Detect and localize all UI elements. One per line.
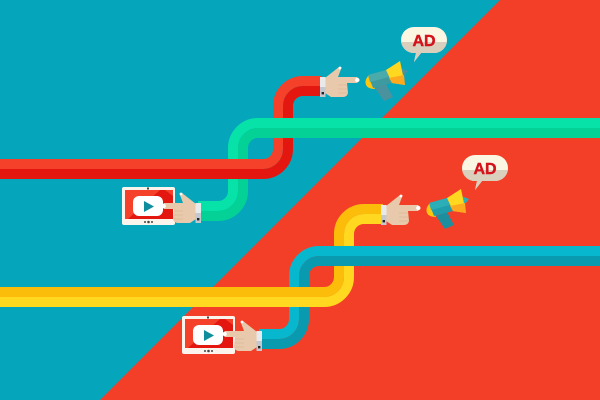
green tube (198, 123, 600, 216)
lower AD speech bubble (462, 155, 508, 190)
yellow tube (0, 209, 383, 302)
upper AD speech bubble (401, 27, 447, 62)
green tube crossing over red (262, 118, 302, 138)
upper AD speech bubble: AD (412, 33, 436, 50)
upper megaphone (365, 61, 408, 101)
blue tube crossing over yellow (323, 246, 363, 266)
hand pointing at upper megaphone (320, 67, 360, 97)
lower tablet with play button (182, 316, 235, 354)
blue tube (259, 251, 600, 344)
lower AD speech bubble: AD (473, 161, 497, 178)
hand pressing upper tablet (162, 193, 201, 223)
lower megaphone (426, 189, 469, 229)
hand pressing lower tablet (222, 321, 262, 351)
upper tablet with play button (122, 187, 175, 225)
red tube (0, 81, 322, 174)
hand pointing at lower megaphone (381, 195, 420, 225)
